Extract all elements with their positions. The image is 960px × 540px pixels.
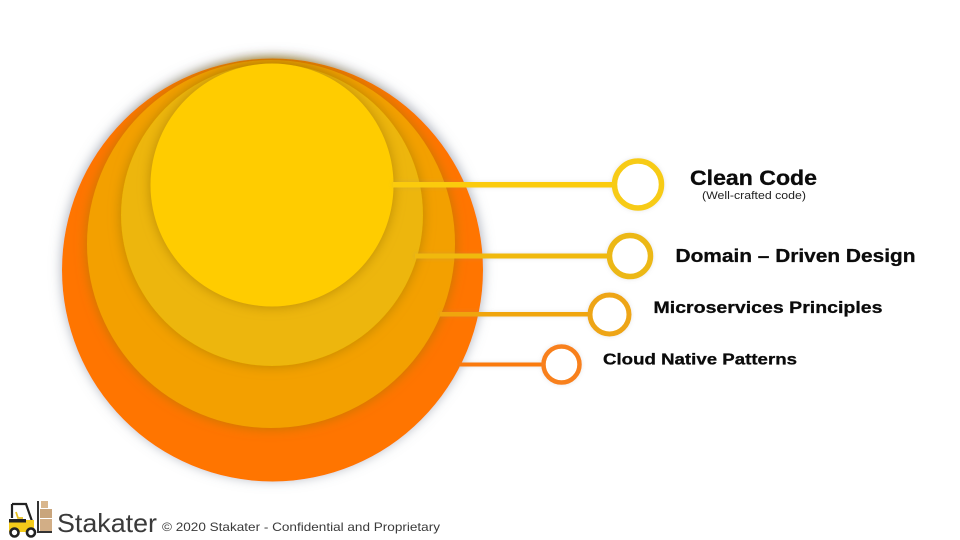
connector line: Cloud Native Patterns — [460, 362, 545, 366]
subheading: Well-crafted code: (Well-crafted code) — [702, 190, 806, 202]
connector line: Microservices Principles — [440, 312, 592, 316]
concentric circles diagram — [62, 58, 483, 482]
heading: Microservices Principles: Microservices Principles — [654, 298, 882, 317]
heading: Domain – Driven Design: Domain – Driven Design — [676, 245, 916, 266]
connector ring: Clean Code — [614, 161, 662, 208]
layer: Microservices Principles circle — [87, 60, 455, 428]
connector: Cloud Native Patterns — [460, 346, 580, 382]
forklift mast — [38, 501, 52, 532]
stacked boxes — [41, 501, 48, 508]
connector ring: Domain-Driven Design — [610, 236, 650, 276]
heading: Clean Code: Clean Code — [690, 167, 817, 190]
layer: Clean Code circle — [150, 64, 394, 306]
heading: Cloud Native Patterns: Cloud Native Patterns — [603, 352, 797, 368]
connector: Domain-Driven Design — [415, 236, 650, 276]
connector line: Clean Code — [393, 182, 615, 188]
connector line: Domain-Driven Design — [415, 254, 610, 258]
layer: Domain-Driven Design circle — [121, 64, 423, 366]
forklift seat — [16, 512, 23, 518]
logo wordmark: Stakater: Stakater — [57, 508, 157, 538]
forklift wheels — [10, 528, 18, 536]
forklift cab — [12, 504, 33, 524]
footer copyright: © 2020 Stakater - Confidential and Proprietary — [162, 520, 440, 534]
icon: forklift logo — [9, 501, 52, 536]
connector ring: Microservices Principles — [590, 295, 629, 334]
layer: Cloud Native Patterns circle — [62, 58, 483, 482]
forklift body — [9, 520, 34, 532]
connector: Clean Code — [393, 161, 662, 208]
connector: Microservices Principles — [440, 295, 629, 334]
connector ring: Cloud Native Patterns — [544, 346, 580, 382]
